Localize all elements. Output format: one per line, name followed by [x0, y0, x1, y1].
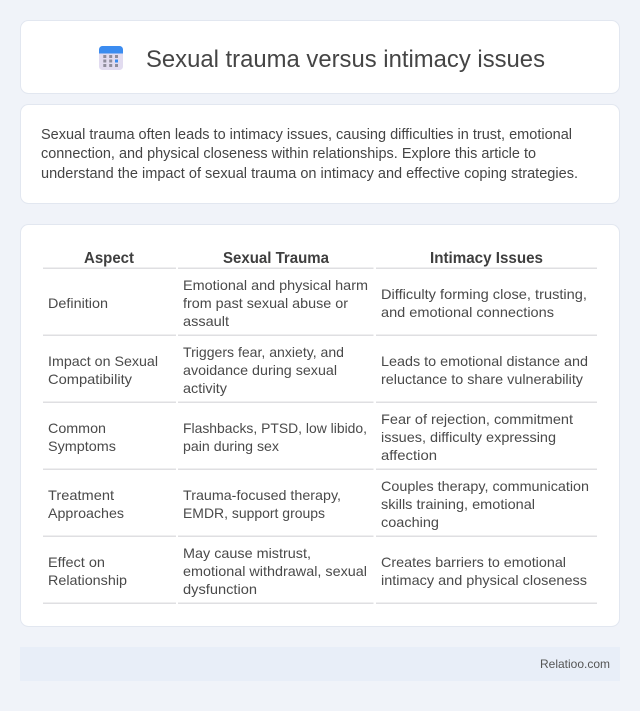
row: definition: Emotional and physical harm — [183, 277, 368, 293]
row: common symptoms: affection — [381, 447, 437, 463]
row: definition — [48, 277, 587, 329]
row: treatment approaches: Couples therapy, communication — [381, 478, 589, 494]
row: effect on relationship: dysfunction — [183, 581, 257, 597]
row: common symptoms: pain during sex — [183, 438, 279, 454]
row: common symptoms: Common — [48, 420, 106, 436]
title: Sexual trauma versus intimacy issues — [146, 46, 545, 73]
panel: introduction card — [20, 104, 620, 204]
intro text — [41, 127, 578, 182]
row: definition: from past sexual abuse or — [183, 295, 348, 311]
row: effect on relationship: Effect on — [48, 554, 105, 570]
row: effect on relationship — [48, 545, 587, 597]
row: effect on relationship: emotional withdrawal, sexual — [183, 563, 367, 579]
footer brand text: Relatioo.com — [540, 657, 610, 671]
row: treatment approaches: EMDR, support groups — [183, 505, 325, 521]
row: impact on sexual compatibility — [48, 344, 588, 396]
row: treatment approaches: Treatment — [48, 487, 114, 503]
row: impact on sexual compatibility: Compatibility — [48, 371, 132, 387]
row: effect on relationship: Relationship — [48, 572, 127, 588]
row: impact on sexual compatibility: Impact on Sexual — [48, 353, 158, 369]
row: treatment approaches: Approaches — [48, 505, 124, 521]
row: definition: assault — [183, 313, 229, 329]
row: definition: Difficulty forming close, trusting, — [381, 286, 587, 302]
row: treatment approaches: coaching — [381, 514, 439, 530]
row: impact on sexual compatibility: Leads to emotional distance and — [381, 353, 588, 369]
row: impact on sexual compatibility: avoidance during sexual — [183, 362, 337, 378]
row: treatment approaches — [48, 478, 589, 530]
row: common symptoms: issues, difficulty expressing — [381, 429, 556, 445]
row: impact on sexual compatibility: activity — [183, 380, 227, 396]
table header row — [84, 250, 543, 267]
panel: title card — [20, 20, 620, 94]
intro text: Sexual trauma often leads to intimacy issues, causing difficulties in trust, emotional — [41, 127, 572, 143]
panel: comparison table card — [20, 224, 620, 626]
table header row: Intimacy Issues — [430, 250, 543, 267]
row: impact on sexual compatibility: Triggers fear, anxiety, and — [183, 344, 344, 360]
row: common symptoms: Symptoms — [48, 438, 116, 454]
row: effect on relationship: May cause mistrust, — [183, 545, 311, 561]
footer bar — [20, 647, 620, 681]
table header row: Sexual Trauma — [223, 250, 329, 267]
intro text: connection, and physical closeness within relationships. Explore this article to — [41, 146, 536, 162]
row: impact on sexual compatibility: reluctance to share vulnerability — [381, 371, 583, 387]
row: common symptoms — [48, 411, 573, 463]
row: treatment approaches: Trauma-focused therapy, — [183, 487, 341, 503]
row: effect on relationship: Creates barriers to emotional — [381, 554, 566, 570]
row: treatment approaches: skills training, emotional — [381, 496, 535, 512]
row: definition: Definition — [48, 295, 108, 311]
row: common symptoms: Fear of rejection, commitment — [381, 411, 573, 427]
row: effect on relationship: intimacy and physical closeness — [381, 572, 587, 588]
icon: calendar — [99, 46, 123, 70]
row: common symptoms: Flashbacks, PTSD, low libido, — [183, 420, 367, 436]
intro text: understand the impact of sexual trauma on intimacy and effective coping strategies. — [41, 166, 578, 182]
row: definition: and emotional connections — [381, 304, 554, 320]
table header row: Aspect — [84, 250, 135, 267]
